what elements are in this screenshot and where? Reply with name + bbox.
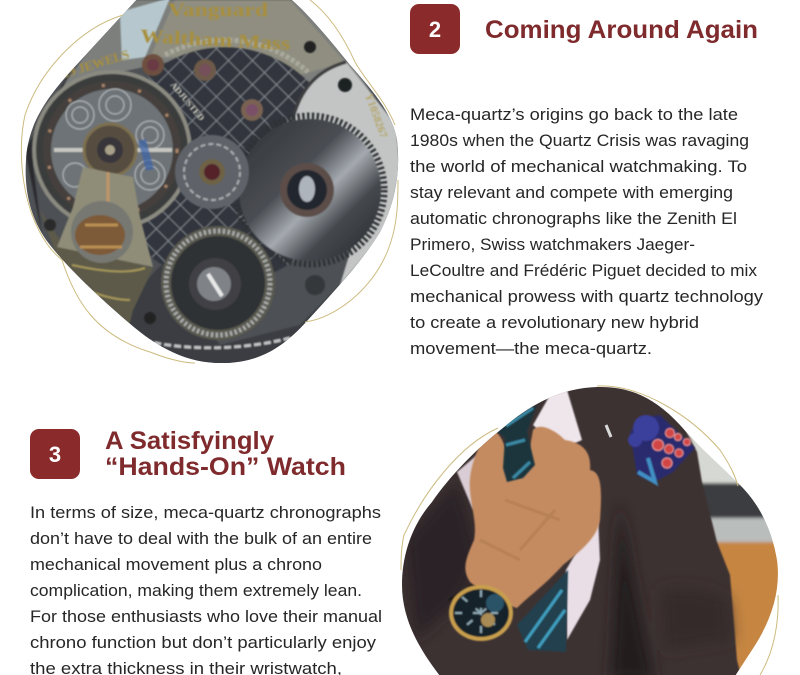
lower tie xyxy=(517,570,568,652)
jewels xyxy=(44,41,352,324)
body text: section 2: mechanical prowess with quartz technology xyxy=(410,287,764,306)
hand xyxy=(465,427,601,608)
badge 3 xyxy=(30,429,80,479)
pocket square xyxy=(628,415,695,483)
heading: Coming Around Again: Coming Around Again xyxy=(485,16,758,44)
body text: section 2: LeCoultre and Frédéric Piguet decided to mix xyxy=(410,261,757,280)
upper tie xyxy=(498,405,537,482)
shirt xyxy=(457,390,600,640)
body text: section 2: movement—the meca-quartz. xyxy=(410,339,652,358)
body text: section 3: chrono function but don’t particularly enjoy xyxy=(30,633,377,652)
balance cock xyxy=(57,167,153,267)
lattice plate xyxy=(142,46,310,272)
body text: section 2: stay relevant and compete with emerging xyxy=(410,183,733,202)
badge 2 xyxy=(410,4,460,54)
heading: A Satisfyingly Hands-On Watch: “Hands-On” Watch xyxy=(105,453,346,481)
body text: section 2 xyxy=(410,105,764,358)
body text: section 3: mechanical movement plus a chrono xyxy=(30,555,322,574)
big gear xyxy=(236,116,384,264)
engraved lettering: 19 JEWELS xyxy=(60,46,131,81)
jacket folds xyxy=(405,480,732,675)
jacket body and sleeve xyxy=(395,380,742,675)
engraved lettering: ADJUSTED xyxy=(168,80,207,123)
body text: section 3: For those enthusiasts who love their manual xyxy=(30,607,382,626)
lapel pin xyxy=(606,425,611,437)
engraved lettering xyxy=(60,0,390,140)
body text: section 2: the world of mechanical watchmaking. To xyxy=(410,157,747,176)
body text: section 3: don’t have to deal with the bulk of an entire xyxy=(30,529,372,548)
body text: section 3: complication, making them extremely lean. xyxy=(30,581,362,600)
decorative gold outline, photo 1 xyxy=(21,0,398,363)
blurred background xyxy=(688,434,778,675)
body text: section 3: In terms of size, meca-quartz chronographs xyxy=(30,503,381,522)
heading: A Satisfyingly Hands-On Watch xyxy=(105,427,346,481)
engraved lettering: Vanguard xyxy=(168,0,269,21)
badge 2: 2 xyxy=(429,17,441,42)
photo: man in suit adjusting tie, wearing gold watch xyxy=(395,380,790,675)
balance wheel xyxy=(34,72,190,228)
section 3 xyxy=(30,427,382,675)
right plate xyxy=(292,62,400,285)
heading: A Satisfyingly Hands-On Watch: A Satisfyingly xyxy=(105,427,274,455)
engraved lettering: Waltham Mass xyxy=(140,26,291,55)
engraved lettering: Y1058267 xyxy=(362,92,390,140)
lower plate xyxy=(130,265,340,363)
wristwatch xyxy=(448,585,513,641)
decorative gold outline, photo 2 xyxy=(401,386,778,675)
photo: mechanical watch movement xyxy=(0,0,410,370)
body text: section 2: to create a revolutionary new hybrid xyxy=(410,313,699,332)
body text: section 2: automatic chronographs like the Zenith El xyxy=(410,209,737,228)
body text: section 3 xyxy=(30,503,382,675)
dark left edge xyxy=(26,77,68,230)
body text: section 2: Meca-quartz’s origins go back to the late xyxy=(410,105,738,124)
lower-left engraved corner xyxy=(42,214,152,324)
small gear xyxy=(161,226,275,340)
badge 3: 3 xyxy=(49,442,61,467)
body text: section 2: Primero, Swiss watchmakers Jaeger- xyxy=(410,235,695,254)
body text: section 2: 1980s when the Quartz Crisis was ravaging xyxy=(410,131,749,150)
section 2 xyxy=(410,4,764,358)
top plate with engraving xyxy=(63,0,372,125)
